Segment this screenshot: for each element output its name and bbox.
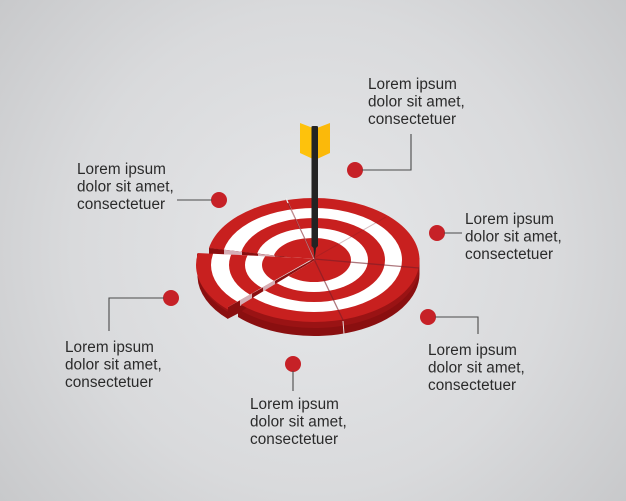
icon: dart arrow [300, 123, 330, 259]
callout: bottom [250, 356, 347, 448]
callout: lower right [420, 309, 525, 394]
target board [196, 198, 420, 336]
callout: upper left [77, 161, 227, 213]
detached segment [196, 253, 314, 319]
callout: lower right: Lorem ipsum [428, 342, 517, 359]
callout: bottom: consectetuer [250, 431, 338, 448]
callout: lower left [65, 290, 179, 391]
callout: lower right: consectetuer [428, 377, 516, 394]
callout: upper left: dolor sit amet, [77, 178, 174, 196]
callout: upper left: consectetuer [77, 196, 165, 213]
callout: lower left: dolor sit amet, [65, 356, 162, 374]
main board top surface [241, 198, 420, 322]
arrow shaft [312, 126, 318, 259]
callout: top right: consectetuer [368, 111, 456, 128]
callout: top right: dolor sit amet, [368, 94, 465, 110]
main board side wall [238, 258, 420, 336]
callout: upper left: Lorem ipsum [77, 161, 166, 178]
callout: bottom: dolor sit amet, [250, 414, 347, 430]
callout: top right: Lorem ipsum [368, 76, 457, 93]
callout: bottom: Lorem ipsum [250, 396, 339, 413]
callout: right: consectetuer [465, 246, 553, 263]
callout: right [429, 211, 562, 263]
callout: lower left: Lorem ipsum [65, 339, 154, 356]
segment seams [286, 198, 419, 320]
callout: right: dolor sit amet, [465, 228, 562, 246]
arrow fletching [300, 123, 330, 159]
callout: top right [347, 76, 465, 178]
callout: lower left: consectetuer [65, 374, 153, 391]
upper-left segment [208, 200, 314, 261]
callout: right: Lorem ipsum [465, 211, 554, 228]
callout: lower right: dolor sit amet, [428, 360, 525, 376]
